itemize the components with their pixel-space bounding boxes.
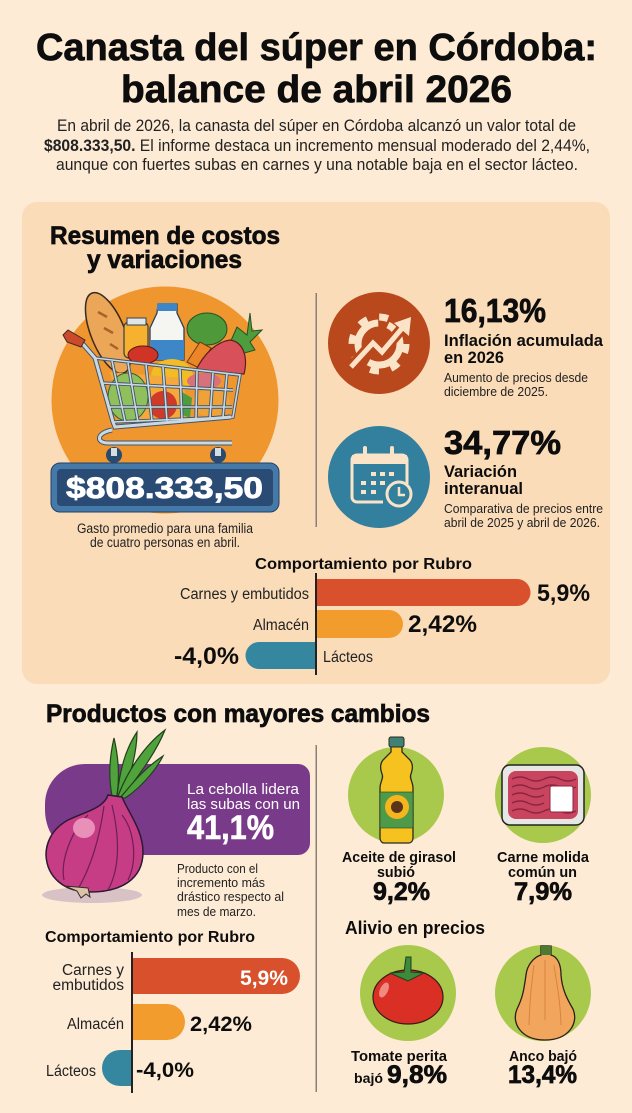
intro text: $808.333,50. El informe destaca un incremento mensual moderado del 2,44%,: [44, 136, 590, 155]
cebolla caption: mes de marzo.: [177, 904, 256, 919]
stat: inflación acumulada: en 2026: [444, 348, 504, 367]
bar chart: comportamiento por rubro: Almacén: [253, 617, 309, 634]
heading: productos con mayores cambios: Productos con mayores cambios: [46, 700, 430, 728]
stat: inflación acumulada: Aumento de precios desde: [444, 370, 588, 385]
bar chart: comportamiento por rubro 2: Lácteos: [46, 1063, 96, 1080]
bar chart: comportamiento por rubro: Lácteos: [323, 649, 373, 666]
intro text: aunque con fuertes subas en carnes y una notable baja en el sector lácteo.: [56, 155, 578, 174]
icon: onion: [42, 730, 165, 903]
bar chart: comportamiento por rubro 2: Almacén: [67, 1016, 124, 1033]
product: carne molida: Carne molida: [497, 849, 590, 866]
bar chart: comportamiento por rubro 2: 2,42%: [190, 1013, 252, 1036]
stat: variación interanual: [328, 424, 603, 530]
intro text: [44, 116, 590, 174]
panel: cebolla callout: 41,1%: [187, 809, 274, 847]
stat: variación interanual: Comparativa de precios entre: [444, 501, 603, 516]
bar chart: comportamiento por rubro 2: -4,0%: [136, 1059, 194, 1082]
panel: cebolla callout: [42, 730, 310, 903]
bar chart: comportamiento por rubro: 5,9%: [537, 580, 590, 607]
icon: butternut squash: [495, 945, 591, 1041]
stat: variación interanual: abril de 2025 y abril de 2026.: [444, 515, 600, 530]
title: balance de abril 2026: [121, 69, 512, 111]
product: carne molida: común un: [508, 864, 577, 881]
icon: oil bottle: [348, 737, 444, 843]
product: aceite de girasol: Aceite de girasol: [342, 849, 456, 866]
bar chart: comportamiento por rubro: Carnes y embutidos: [180, 586, 309, 603]
heading: resumen: y variaciones: [87, 246, 242, 274]
bar chart: comportamiento por rubro: -4,0%: [174, 643, 239, 670]
bar chart: comportamiento por rubro: 2,42%: [408, 611, 477, 638]
heading: resumen: Resumen de costos: [50, 222, 280, 250]
price caption: de cuatro personas en abril.: [90, 535, 240, 550]
bar chart: comportamiento por rubro 2: [45, 929, 300, 1093]
price caption: Gasto promedio para una familia: [77, 521, 253, 536]
bar chart: comportamiento por rubro 2: Comportamiento por Rubro: [45, 929, 255, 946]
product: carne molida: 7,9%: [514, 878, 572, 906]
icon: gear with arrow: [328, 292, 430, 394]
product: anco: Anco bajó: [509, 1048, 577, 1065]
cebolla caption: Producto con el: [177, 861, 258, 876]
icon: calendar with clock: [328, 426, 430, 528]
heading: alivio en precios: Alivio en precios: [345, 918, 485, 938]
price badge: [51, 463, 279, 512]
intro text: En abril de 2026, la canasta del súper en Córdoba alcanzó un valor total de: [57, 116, 576, 135]
cebolla caption: incremento más: [177, 875, 265, 890]
panel: resumen de costos: [22, 202, 610, 684]
stat: inflación acumulada: Inflación acumulada: [444, 331, 604, 350]
product: anco: [495, 945, 591, 1089]
bar chart: comportamiento por rubro 2: 5,9%: [240, 967, 288, 990]
panel: cebolla callout: La cebolla lidera: [187, 782, 300, 798]
price badge: $808.333,50: [66, 472, 263, 505]
stat: inflación acumulada: 16,13%: [444, 292, 546, 329]
icon: tomato: [360, 945, 456, 1041]
product: aceite de girasol: [342, 737, 456, 906]
product: carne molida: [495, 747, 591, 906]
product: aceite de girasol: subió: [377, 864, 415, 881]
title: Canasta del súper en Córdoba:: [36, 27, 597, 69]
product: aceite de girasol: 9,2%: [373, 878, 430, 906]
product: anco: 13,4%: [508, 1061, 577, 1089]
price caption: [77, 521, 253, 550]
icon: shopping cart: [52, 286, 278, 514]
bar chart: comportamiento por rubro 2: Carnes y: [62, 962, 124, 979]
bar chart: comportamiento por rubro 2: embutidos: [52, 977, 124, 994]
title: [36, 27, 597, 111]
icon: ground meat tray: [495, 747, 591, 843]
product: tomate perita: bajó: [354, 1070, 383, 1086]
product: tomate perita: [351, 945, 456, 1089]
stat: inflación acumulada: diciembre de 2025.: [444, 384, 548, 399]
product: tomate perita: Tomate perita: [351, 1048, 448, 1065]
stat: inflación acumulada: [328, 292, 604, 399]
cebolla caption: drástico respecto al: [177, 889, 284, 904]
stat: variación interanual: Variación: [444, 462, 517, 481]
stat: variación interanual: interanual: [444, 479, 523, 498]
panel: cebolla callout: las subas con un: [187, 797, 300, 813]
heading: resumen: [50, 222, 280, 274]
bar chart: comportamiento por rubro: [174, 556, 590, 675]
stat: variación interanual: 34,77%: [444, 424, 561, 461]
product: tomate perita: 9,8%: [387, 1061, 447, 1089]
bar chart: comportamiento por rubro: Comportamiento por Rubro: [255, 556, 472, 573]
cebolla caption: [177, 861, 284, 919]
